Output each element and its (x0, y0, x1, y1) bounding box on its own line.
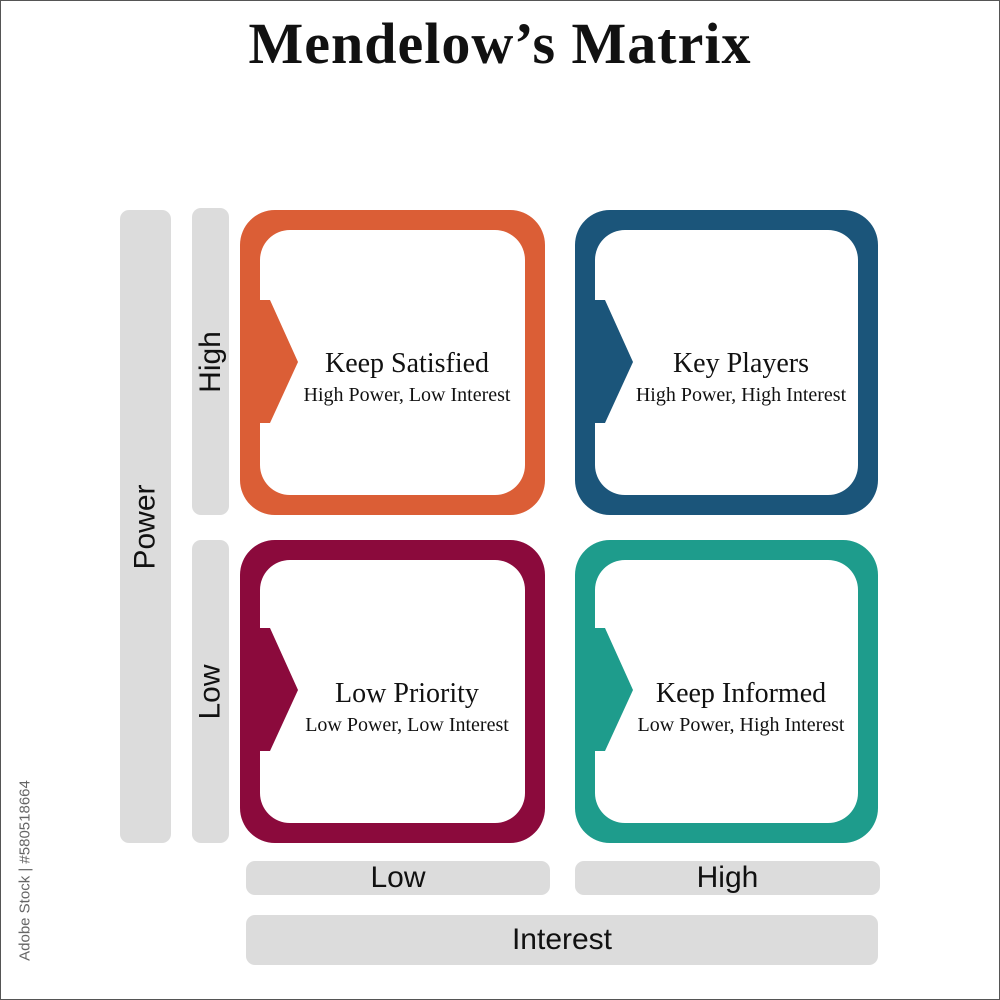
text: key players (636, 348, 846, 406)
quadrant: keep informed (575, 540, 878, 843)
axis: power (120, 210, 171, 843)
axis label: interest low (246, 861, 550, 895)
watermark id: Adobe Stock | #580518664 (16, 780, 34, 961)
text: keep informed: Low Power, High Interest (638, 714, 844, 736)
text: low priority: Low Priority (335, 678, 479, 709)
text: keep informed: Keep Informed (656, 678, 826, 709)
axis label: power high (192, 208, 229, 515)
axis: power: Power (129, 484, 162, 569)
title: Mendelow’s Matrix (249, 11, 751, 76)
quadrant: low priority (240, 540, 545, 843)
quadrant: key players (575, 210, 878, 515)
quadrant: keep satisfied (240, 210, 545, 515)
axis label: interest high: High (697, 861, 758, 894)
text: key players: High Power, High Interest (636, 384, 846, 406)
text: keep satisfied: Keep Satisfied (325, 348, 489, 379)
text: key players: Key Players (673, 348, 809, 379)
axis label: interest low: Low (370, 861, 426, 894)
axis label: interest high (575, 861, 880, 895)
text: keep satisfied (304, 348, 510, 406)
axis: interest (246, 915, 878, 965)
text: keep informed (638, 678, 844, 736)
axis label: power high: High (194, 331, 227, 392)
axis: interest: Interest (512, 923, 612, 956)
text: keep satisfied: High Power, Low Interest (304, 384, 510, 406)
text: low priority: Low Power, Low Interest (305, 714, 509, 736)
axis label: power low: Low (194, 664, 227, 719)
axis label: power low (192, 540, 229, 843)
text: low priority (305, 678, 509, 736)
